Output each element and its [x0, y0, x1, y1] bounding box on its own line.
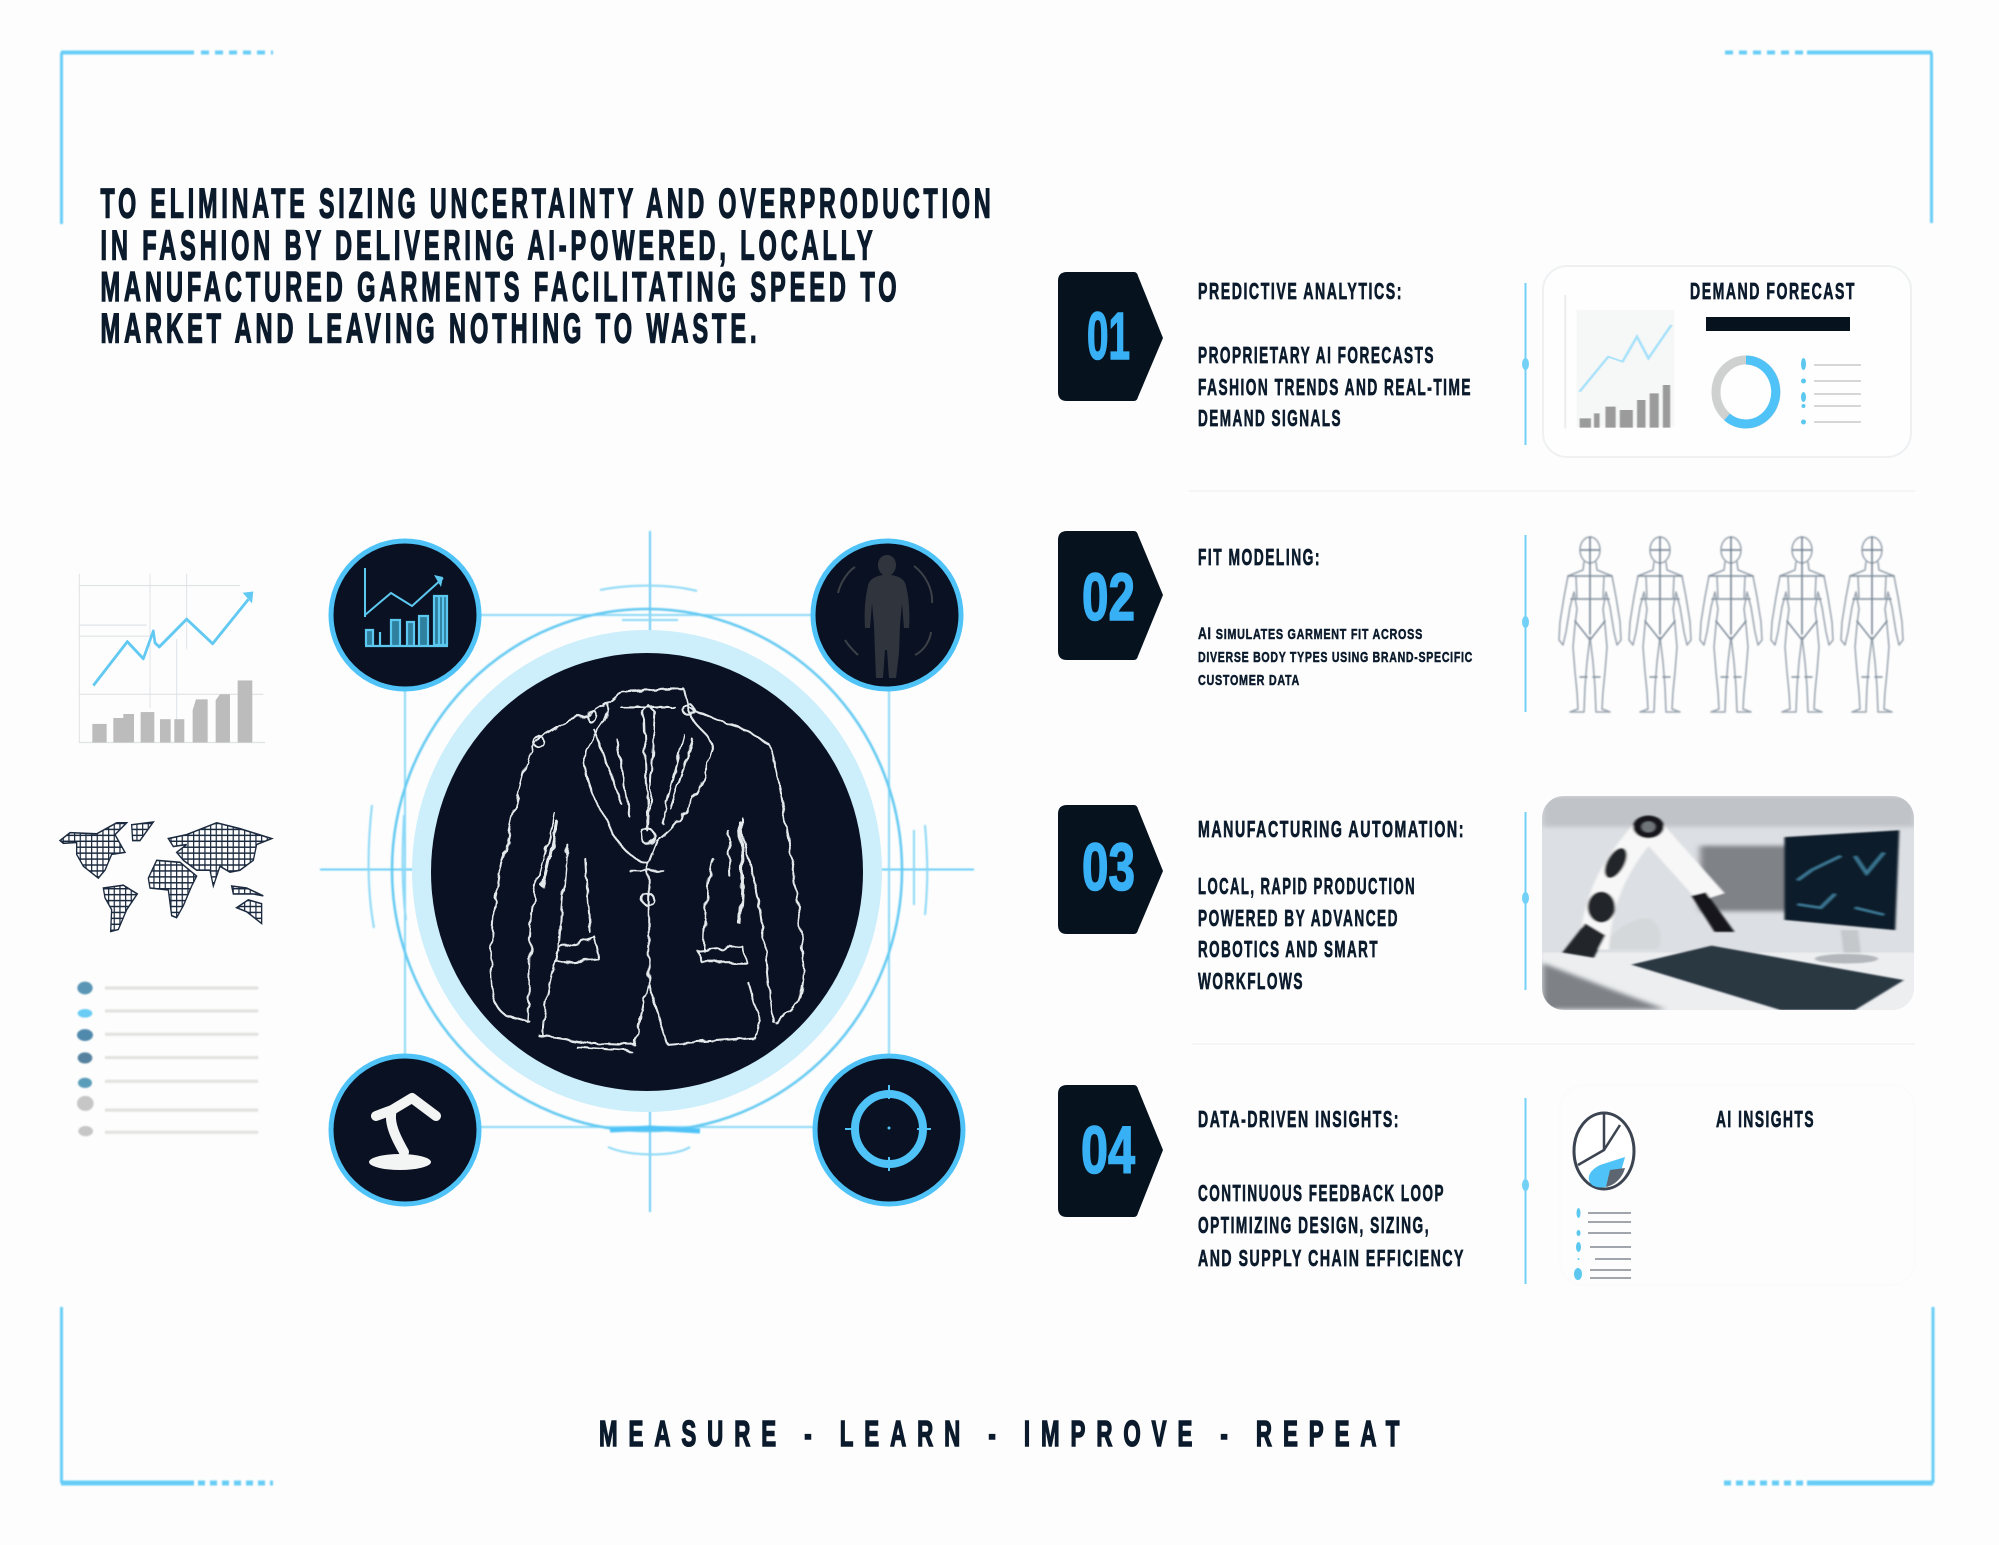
- badge 04: [1058, 1085, 1163, 1217]
- item 03 text: manufacturing automation: [1198, 816, 1465, 994]
- item 02 text: fit modeling: CUSTOMER DATA: [1198, 672, 1300, 689]
- item 02 text: fit modeling: DIVERSE BODY TYPES USING BRAND-SPECIFIC: [1198, 649, 1473, 666]
- icon: analytics chart circle: [331, 541, 479, 689]
- item 03 text: manufacturing automation: POWERED BY ADVANCED: [1198, 905, 1399, 931]
- item 04 text: data-driven insights: CONTINUOUS FEEDBACK LOOP: [1198, 1180, 1445, 1206]
- frame corner: bottom left: [61, 1307, 273, 1483]
- icon: target circle: [815, 1056, 963, 1204]
- title: mission statement: TO ELIMINATE SIZING UNCERTAINTY AND OVERPRODUCTION: [100, 180, 994, 226]
- title: mission statement: MANUFACTURED GARMENTS FACILITATING SPEED TO: [100, 263, 900, 310]
- panel: five body fit figures: [1559, 537, 1903, 712]
- panel: AI insights with pie and list: AI INSIGHTS: [1716, 1106, 1815, 1132]
- item 03 text: manufacturing automation: ROBOTICS AND SMART: [1198, 936, 1379, 962]
- item 04 text: data-driven insights: OPTIMIZING DESIGN, SIZING,: [1198, 1212, 1430, 1238]
- item 02 text: fit modeling: FIT MODELING:: [1198, 544, 1321, 570]
- panel: demand forecast dashboard: DEMAND FORECAST: [1690, 278, 1856, 304]
- central hub: target rings and connectors: [320, 531, 974, 1212]
- title: mission statement: IN FASHION BY DELIVERING AI-POWERED, LOCALLY: [100, 222, 876, 268]
- item 04 text: data-driven insights: DATA-DRIVEN INSIGHTS:: [1198, 1106, 1400, 1132]
- icon: robot arm circle: [331, 1056, 479, 1204]
- item 02 divider with dot: [1522, 535, 1529, 712]
- item 03 text: manufacturing automation: LOCAL, RAPID PRODUCTION: [1198, 873, 1416, 899]
- badge 02: 02: [1082, 560, 1135, 635]
- frame corner: top right: [1722, 52, 1932, 223]
- badge 04: 04: [1081, 1113, 1135, 1188]
- central circle: jacket outline illustration: [412, 630, 882, 1112]
- item 02 text: fit modeling: AI SIMULATES GARMENT FIT ACROSS: [1198, 624, 1423, 643]
- item 03 text: manufacturing automation: MANUFACTURING AUTOMATION:: [1198, 816, 1465, 842]
- title: mission statement: [100, 180, 994, 352]
- badge 01: 01: [1087, 299, 1130, 374]
- item 04 text: data-driven insights: [1198, 1106, 1465, 1271]
- item 04 text: data-driven insights: AND SUPPLY CHAIN EFFICIENCY: [1198, 1245, 1465, 1271]
- item 01 text: predictive analytics: PREDICTIVE ANALYTICS:: [1198, 278, 1403, 304]
- item 01 text: predictive analytics: DEMAND SIGNALS: [1198, 405, 1342, 431]
- left icon: crosshatched world map: [60, 822, 272, 931]
- badge 02: [1058, 531, 1163, 660]
- item 01 text: predictive analytics: FASHION TRENDS AND REAL-TIME: [1198, 374, 1472, 400]
- panel: AI insights with pie and list: [1560, 1085, 1915, 1285]
- footer tagline: MEASURE - LEARN - IMPROVE - REPEAT: [599, 1415, 1399, 1454]
- item 02 text: fit modeling: [1198, 544, 1473, 689]
- left list: bullets and text lines: [77, 982, 258, 1136]
- item 03 divider with dot: [1522, 812, 1529, 990]
- frame corner: bottom right: [1724, 1307, 1933, 1483]
- icon: body silhouette circle: [813, 541, 961, 689]
- badge 01: [1058, 272, 1163, 401]
- panel: robot arm photo: [1542, 796, 1915, 1011]
- item 03 text: manufacturing automation: WORKFLOWS: [1198, 968, 1304, 994]
- item 04 divider with dot: [1522, 1098, 1529, 1284]
- badge 03: 03: [1082, 830, 1135, 905]
- left chart: growth line and bars: [79, 574, 265, 743]
- title: mission statement: MARKET AND LEAVING NOTHING TO WASTE.: [100, 304, 761, 352]
- item 01 text: predictive analytics: PROPRIETARY AI FORECASTS: [1198, 342, 1435, 368]
- panel: demand forecast dashboard: [1543, 266, 1911, 457]
- badge 03: [1058, 805, 1163, 934]
- item 01 divider with dot: [1522, 283, 1529, 445]
- item 01 text: predictive analytics: [1198, 278, 1472, 431]
- frame corner: top left: [61, 52, 273, 224]
